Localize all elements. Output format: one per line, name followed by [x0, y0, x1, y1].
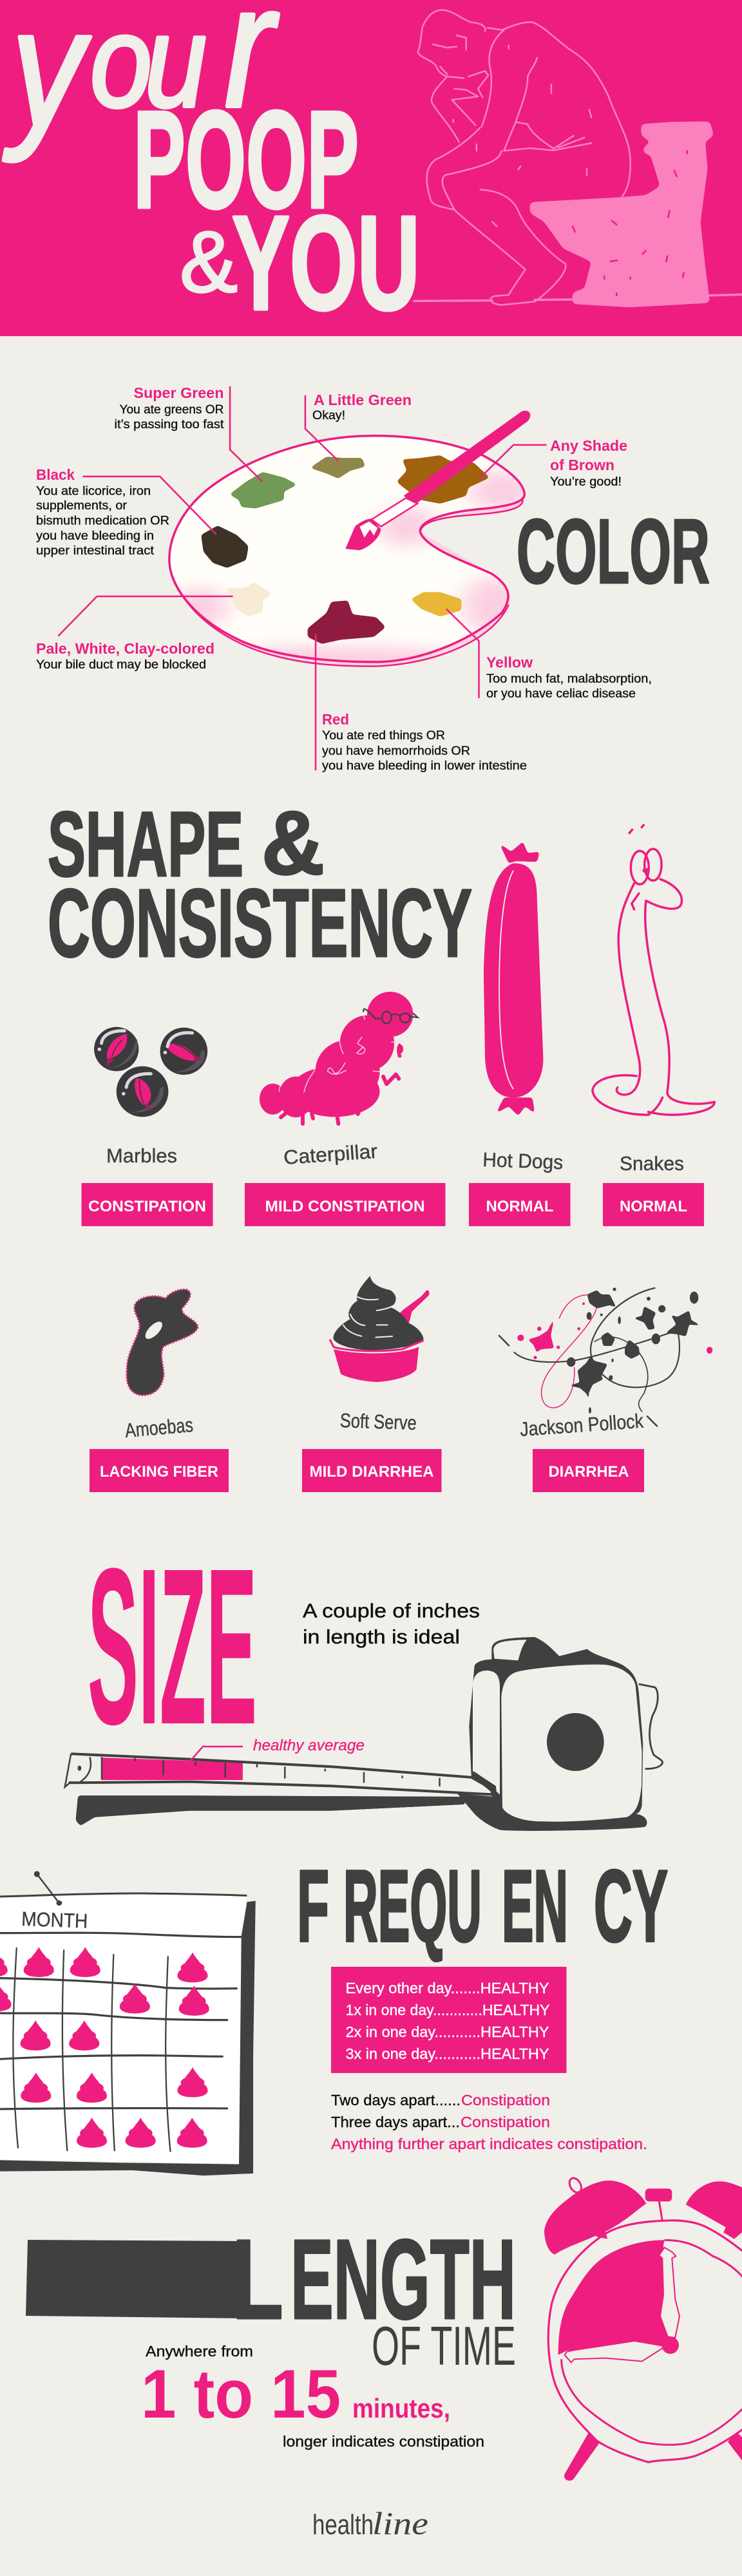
label: pale white clay-colored: Pale, White, Clay-colored — [36, 640, 214, 657]
label: black: Black — [36, 466, 75, 483]
text: constipation frequencies — [331, 2092, 647, 2152]
label: super green: Super Green — [134, 384, 224, 401]
stat: 1 to 15 minutes: 1 to 15 — [141, 2355, 341, 2432]
paint blob: pale — [226, 582, 272, 616]
heading: frequency: EN — [502, 1850, 568, 1963]
label: jackson pollock: Jackson Pollock — [519, 1410, 644, 1441]
label: soft serve: Soft Serve — [339, 1409, 417, 1434]
panel: healthy frequencies: 2x in one day...........HEALTHY — [345, 2023, 549, 2040]
text: constipation frequencies: Anything further apart indicates constipation. — [331, 2136, 647, 2152]
logo: healthline: health — [312, 2509, 374, 2541]
panel: shape and consistency — [48, 792, 714, 1492]
heading: shape and consistency: SHAPE — [48, 793, 243, 896]
paint blob: brown — [397, 455, 490, 504]
tag: mild diarrhea: MILD DIARRHEA — [309, 1463, 434, 1481]
tag: lacking fiber — [90, 1449, 229, 1492]
heading: length of time: OF TIME — [372, 2316, 516, 2377]
panel: size — [65, 1522, 663, 1831]
text: anywhere from: Anywhere from — [146, 2343, 253, 2360]
label: super green — [115, 384, 224, 431]
text: constipation frequencies: Two days apart...... — [331, 2092, 461, 2108]
tag: diarrhea — [533, 1449, 644, 1492]
label: snakes: Snakes — [620, 1152, 684, 1175]
text: longer indicates constipation: longer indicates constipation — [283, 2433, 484, 2450]
text: ideal size: in length is ideal — [303, 1625, 460, 1648]
panel: frequency — [0, 1850, 668, 2175]
label: any shade of brown: Any Shade — [550, 437, 627, 454]
heading: shape and consistency: & — [262, 792, 325, 893]
heading: frequency: REQU — [343, 1850, 482, 1963]
panel: size: SIZE — [88, 1522, 257, 1771]
label: marbles: Marbles — [106, 1144, 177, 1167]
label: pale white clay-colored — [36, 640, 214, 672]
logo: healthline: line — [372, 2505, 428, 2541]
heading: shape and consistency: CONSISTENCY — [48, 869, 472, 977]
paint blob: yellow — [411, 592, 461, 616]
icon: marbles — [94, 1027, 207, 1117]
heading: length of time: ENGTH — [290, 2217, 516, 2343]
paint blob: super green — [229, 472, 297, 508]
panel: healthy frequencies — [331, 1967, 567, 2073]
logo: healthline — [312, 2505, 428, 2541]
label: any shade of brown: You’re good! — [550, 475, 622, 489]
label: black: You ate licorice, iron — [36, 484, 151, 498]
heading: length of time — [26, 2217, 516, 2377]
callout: healthy average: healthy average — [253, 1737, 365, 1754]
label: yellow: Too much fat, malabsorption, — [486, 672, 652, 686]
tag: mild diarrhea — [302, 1449, 442, 1492]
tag: mild constipation: MILD CONSTIPATION — [265, 1198, 425, 1215]
label: hot dogs: Hot Dogs — [482, 1148, 564, 1173]
tag: mild constipation — [245, 1183, 446, 1226]
heading: frequency: F — [297, 1850, 329, 1963]
icon: tape measure — [65, 1637, 663, 1831]
label: black: supplements, or — [36, 499, 128, 513]
tag: lacking fiber: LACKING FIBER — [100, 1463, 218, 1481]
paint blob: black — [201, 526, 249, 568]
label: pale white clay-colored: Your bile duct may be blocked — [36, 658, 206, 672]
heading: frequency: CY — [594, 1850, 668, 1963]
heading: length of time: L — [232, 2217, 283, 2343]
label: black: upper intestinal tract — [36, 544, 155, 558]
tag: normal hot dogs: NORMAL — [486, 1198, 554, 1215]
icon: soft serve — [330, 1276, 430, 1382]
panel: healthy frequencies: 1x in one day............HEALTHY — [345, 2002, 550, 2018]
icon: calendar — [0, 1871, 256, 2175]
label: black — [36, 466, 169, 558]
leader lines — [58, 386, 547, 770]
label: super green: You ate greens OR — [120, 403, 224, 417]
label: any shade of brown: of Brown — [550, 457, 614, 473]
icon: caterpillar — [260, 992, 418, 1124]
tag: constipation — [81, 1183, 213, 1226]
tag: normal snakes: NORMAL — [620, 1198, 687, 1215]
panel: length of time — [26, 2176, 742, 2481]
label: caterpillar: Caterpillar — [283, 1140, 378, 1169]
label: black: you have bleeding in — [36, 529, 154, 543]
icon: hot dog — [484, 842, 543, 1115]
tag: constipation: CONSTIPATION — [88, 1198, 206, 1215]
panel: color — [36, 384, 710, 773]
label: red: you have hemorrhoids OR — [322, 744, 470, 758]
text: ideal size — [303, 1600, 480, 1648]
icon: paint brush — [345, 412, 529, 550]
tag: normal hot dogs — [469, 1183, 571, 1226]
label: red: Red — [322, 711, 349, 728]
icon: toilet — [530, 122, 714, 307]
label: black: bismuth medication OR — [36, 514, 169, 528]
icon: paint splatter — [499, 1287, 712, 1426]
callout: healthy average — [189, 1737, 365, 1762]
label: a little green: Okay! — [312, 409, 345, 422]
label: a little green — [312, 392, 412, 422]
tag: diarrhea: DIARRHEA — [549, 1463, 629, 1481]
label: yellow — [486, 654, 652, 701]
label: red — [322, 711, 527, 773]
title: poop: POOP — [133, 82, 359, 237]
icon: amoeba — [127, 1289, 198, 1396]
paint blob: little green — [310, 457, 365, 478]
label: month: MONTH — [21, 1908, 88, 1933]
text: constipation frequencies: Three days apart... — [331, 2114, 460, 2130]
paint blob: red — [308, 600, 386, 644]
text: constipation frequencies: Constipation — [461, 2092, 550, 2108]
panel: healthy frequencies: Every other day.......HEALTHY — [345, 1980, 549, 1996]
label: yellow: Yellow — [486, 654, 533, 671]
heading: shape and consistency — [48, 792, 472, 977]
panel: header banner — [0, 0, 742, 338]
icon: thinker figure — [414, 10, 742, 305]
panel: healthy frequencies: 3x in one day...........HEALTHY — [345, 2045, 549, 2062]
label: a little green: A Little Green — [314, 392, 412, 408]
label: yellow: or you have celiac disease — [486, 687, 636, 701]
title: you: YOU — [232, 189, 420, 338]
label: red: You ate red things OR — [322, 729, 445, 743]
text: constipation frequencies: Constipation — [461, 2114, 550, 2130]
icon: snake — [593, 825, 714, 1115]
label: any shade of brown — [550, 437, 627, 489]
icon: alarm clock — [544, 2176, 742, 2481]
label: super green: it’s passing too fast — [115, 418, 224, 431]
stat: 1 to 15 minutes: minutes, — [352, 2393, 450, 2423]
tag: normal snakes — [603, 1183, 704, 1226]
title: ampersand: & — [180, 213, 238, 310]
text: ideal size: A couple of inches — [303, 1600, 480, 1622]
label: amoebas: Amoebas — [124, 1414, 194, 1442]
icon: paint palette — [169, 412, 535, 677]
label: red: you have bleeding in lower intestine — [322, 759, 527, 773]
